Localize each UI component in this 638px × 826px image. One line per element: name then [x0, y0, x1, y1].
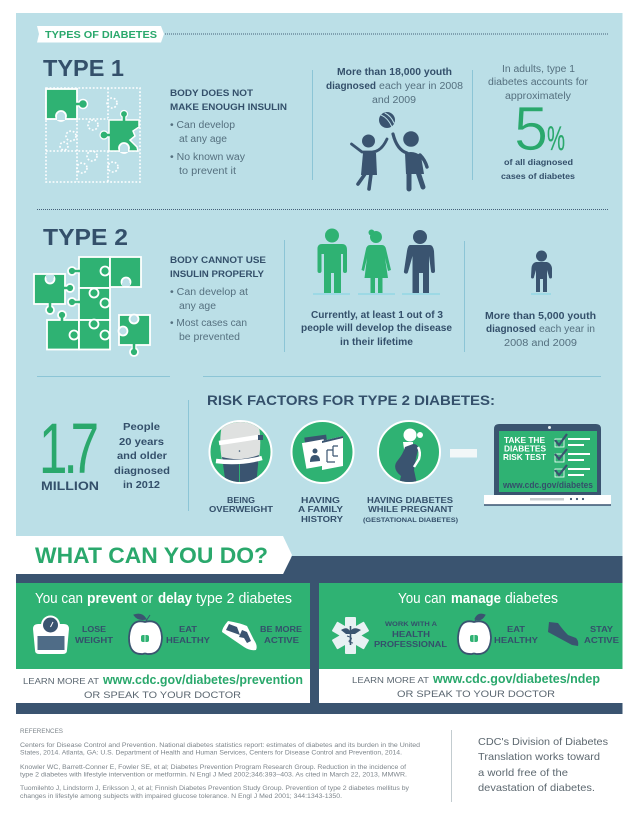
learn more: prevention link: www.cdc.gov/diabetes/prevention [102, 673, 303, 687]
text: type 2 description: • Most cases can [170, 318, 247, 329]
label: eat healthy [166, 625, 211, 645]
labels: risk factors [209, 496, 458, 524]
label: eat healthy: EAT [507, 625, 525, 634]
stat: 5 percent of type 1: 5 [514, 95, 548, 164]
heading: manage diabetes: diabetes [505, 590, 558, 607]
banner: what can you do [16, 536, 292, 574]
text: 5,000 youth stat: diagnosed [486, 324, 536, 335]
text: 5,000 youth stat: each year in [539, 324, 595, 335]
text: people diagnosed: in 2012 [123, 479, 160, 491]
text: people diagnosed: People [123, 421, 160, 433]
text: 1 out of 3: in their lifetime [340, 337, 413, 348]
icon: apple [458, 614, 491, 654]
text: CDC mission statement: CDC's Division of Diabetes [478, 736, 608, 748]
labels: risk factors: WHILE PREGNANT [368, 505, 453, 514]
label: lose weight: WEIGHT [75, 636, 113, 645]
stat: 5 percent of type 1: of all diagnosed [504, 157, 573, 167]
text: type 1 description [170, 88, 287, 177]
references: Centers for Disease Control and Prevention. National diabetes statistics report: estimates of diabetes and its burden in the United [20, 742, 420, 749]
text: type 2 description: • Can develop at [170, 287, 248, 298]
label: eat healthy: HEALTHY [166, 636, 211, 645]
learn more: prevention link [23, 673, 303, 701]
dark action band [16, 556, 622, 714]
laptop: take the diabetes risk test [484, 424, 611, 505]
icon: overweight waist with measuring tape [210, 420, 272, 486]
label: work with a health professional [374, 621, 447, 649]
icon: dark man [404, 230, 435, 293]
references: changes in lifestyle among subjects with impaired glucose tolerance. N Engl J Med 2001; 344:1343-1350. [20, 793, 342, 800]
stat: 5 percent of type 1: approximately [505, 91, 571, 102]
heading: prevent or delay: You can [35, 590, 83, 607]
text: type 2 description: be prevented [179, 332, 240, 343]
laptop: take the diabetes risk test: DIABETES [504, 444, 546, 454]
stat: 5 percent of type 1: In adults, type 1 [502, 64, 575, 75]
text: 5,000 youth stat: 2008 and 2009 [504, 338, 577, 349]
heading: manage diabetes: manage [451, 590, 501, 607]
icon: green woman [362, 230, 391, 293]
labels: risk factors: HAVING [301, 496, 340, 505]
label: lose weight: LOSE [82, 625, 107, 634]
labels: risk factors: A FAMILY [298, 505, 344, 514]
label: stay active: STAY [590, 625, 614, 634]
text: people diagnosed: 20 years [119, 436, 164, 448]
labels: risk factors: OVERWEIGHT [209, 505, 273, 514]
ground lines [313, 293, 551, 295]
icon: green man [317, 228, 347, 293]
icon: type 2 completed puzzle pieces [34, 257, 150, 356]
labels: risk factors: (GESTATIONAL DIABETES) [363, 517, 458, 524]
light blue panel [16, 13, 622, 558]
text: type 2 description: INSULIN PROPERLY [170, 269, 265, 280]
learn more: ndep link: OR SPEAK TO YOUR DOCTOR [397, 689, 555, 700]
icon: dark shoe [548, 622, 578, 646]
heading: prevent or delay: or [141, 590, 153, 607]
learn more: prevention link: LEARN MORE AT [23, 676, 99, 686]
text: type 2 description: BODY CANNOT USE [170, 255, 266, 266]
stat: 5 percent of type 1: cases of diabetes [501, 171, 575, 181]
label: lose weight [75, 625, 113, 645]
text: people diagnosed: and older [117, 450, 167, 462]
icon: two children with ball [352, 112, 427, 189]
label: be more active: BE MORE [260, 625, 303, 634]
text: 18,000 youth stat [326, 67, 463, 106]
text: CDC mission statement: Translation works toward [478, 751, 600, 763]
text: type 1 description: • No known way [170, 152, 245, 163]
text: people diagnosed [114, 421, 170, 491]
panel: manage diabetes [319, 583, 622, 703]
icon: child [531, 250, 552, 292]
labels: risk factors: HAVING DIABETES [367, 496, 454, 505]
references: Knowler WC, Barrett-Conner E, Fowler SE, et al; Diabetes Prevention Program Research Group. Reduction in the incidence of [20, 764, 406, 771]
heading: prevent or delay: prevent [87, 590, 137, 607]
text: 1 out of 3: people will develop the disease [301, 323, 452, 334]
stat: 1.7 million: 1.7 [39, 410, 99, 489]
text: CDC mission statement: a world free of the [478, 767, 568, 779]
text: type 1 description: MAKE ENOUGH INSULIN [170, 102, 287, 113]
heading: manage diabetes: You can [398, 590, 446, 607]
labels: risk factors: BEING [227, 496, 255, 505]
text: people diagnosed: diagnosed [114, 465, 170, 477]
laptop: take the diabetes risk test: www.cdc.gov/diabetes [502, 480, 593, 490]
connector dash [450, 449, 477, 458]
text: CDC mission statement [478, 736, 608, 794]
heading: manage diabetes [398, 590, 558, 607]
text: type 1 description: • Can develop [170, 120, 235, 131]
text: type 1 description: BODY DOES NOT [170, 88, 253, 99]
heading: type 2: TYPE 2 [43, 224, 128, 250]
label: eat healthy: HEALTHY [494, 636, 539, 645]
label: eat healthy [494, 625, 539, 645]
references [20, 728, 420, 800]
text: 18,000 youth stat: and 2009 [372, 95, 416, 106]
laptop: take the diabetes risk test: TAKE THE [504, 435, 545, 445]
text: type 1 description: to prevent it [179, 166, 236, 177]
icon: pregnant woman [378, 421, 440, 484]
text: 1 out of 3: Currently, at least 1 out of 3 [311, 310, 443, 321]
learn more: ndep link: LEARN MORE AT [352, 675, 429, 685]
text: CDC mission statement: devastation of diabetes. [478, 782, 595, 794]
text: type 2 description: any age [179, 301, 216, 312]
icon: type 1 puzzle with missing pieces [46, 88, 140, 182]
icon: family history photos [292, 421, 354, 483]
icon: scale [33, 616, 69, 654]
stat: 1.7 million: MILLION [41, 479, 99, 493]
laptop: take the diabetes risk test: RISK TEST [503, 452, 547, 462]
label: be more active [260, 625, 303, 645]
references: REFERENCES [20, 728, 64, 735]
text: 18,000 youth stat: each year in 2008 [379, 81, 463, 92]
heading: prevent or delay: type 2 diabetes [196, 590, 292, 607]
section tag: types of diabetes [37, 26, 164, 42]
label: eat healthy: EAT [179, 625, 197, 634]
label: be more active: ACTIVE [264, 636, 300, 645]
stat: 5 percent of type 1: % [547, 120, 565, 158]
heading: risk factors: RISK FACTORS FOR TYPE 2 DIABETES: [207, 393, 495, 408]
references: States, 2014. Atlanta, GA: U.S. Department of Health and Human Services, Centers for Disease Control and Prevention, 2014. [20, 750, 402, 756]
label: work with a health professional: PROFESSIONAL [374, 640, 447, 649]
icon: running shoe [222, 621, 257, 650]
label: stay active: ACTIVE [584, 636, 620, 645]
text: type 1 description: at any age [179, 134, 227, 145]
text: type 2 description [170, 255, 266, 343]
learn more: prevention link: OR SPEAK TO YOUR DOCTOR [84, 690, 241, 701]
labels: risk factors: HISTORY [301, 515, 344, 524]
references: Tuomilehto J, Lindstorm J, Eriksson J, et al; Finnish Diabetes Prevention Study Group. Prevention of type 2 diabetes mellitus by [20, 785, 410, 792]
learn more: ndep link [352, 672, 600, 700]
heading: prevent or delay: delay [158, 590, 193, 607]
banner: what can you do: WHAT CAN YOU DO? [35, 543, 268, 568]
text: 18,000 youth stat: More than 18,000 youth [337, 67, 452, 78]
references: type 2 diabetes with lifestyle intervention or metformin. N Engl J Med 2002;346:393–403. As cited in March 22, 2013, MMWR. [20, 772, 407, 778]
heading: prevent or delay [35, 590, 292, 607]
stat: 5 percent of type 1: diabetes accounts for [488, 77, 589, 88]
heading: type 1: TYPE 1 [43, 55, 124, 81]
label: work with a health professional: WORK WITH A [385, 621, 437, 628]
text: 5,000 youth stat: More than 5,000 youth [485, 311, 596, 322]
learn more: ndep link: www.cdc.gov/diabetes/ndep [432, 672, 600, 686]
text: 18,000 youth stat: diagnosed [326, 81, 376, 92]
icon: star of life [332, 617, 369, 654]
section tag: types of diabetes: TYPES OF DIABETES [45, 30, 157, 41]
label: stay active [584, 625, 620, 645]
panel: prevent or delay [16, 583, 310, 703]
label: work with a health professional: HEALTH [392, 630, 430, 639]
icon: apple [129, 614, 162, 654]
stat: 5 percent of type 1 [488, 64, 589, 181]
text: 1 out of 3 [301, 310, 452, 348]
text: 5,000 youth stat [485, 311, 596, 349]
